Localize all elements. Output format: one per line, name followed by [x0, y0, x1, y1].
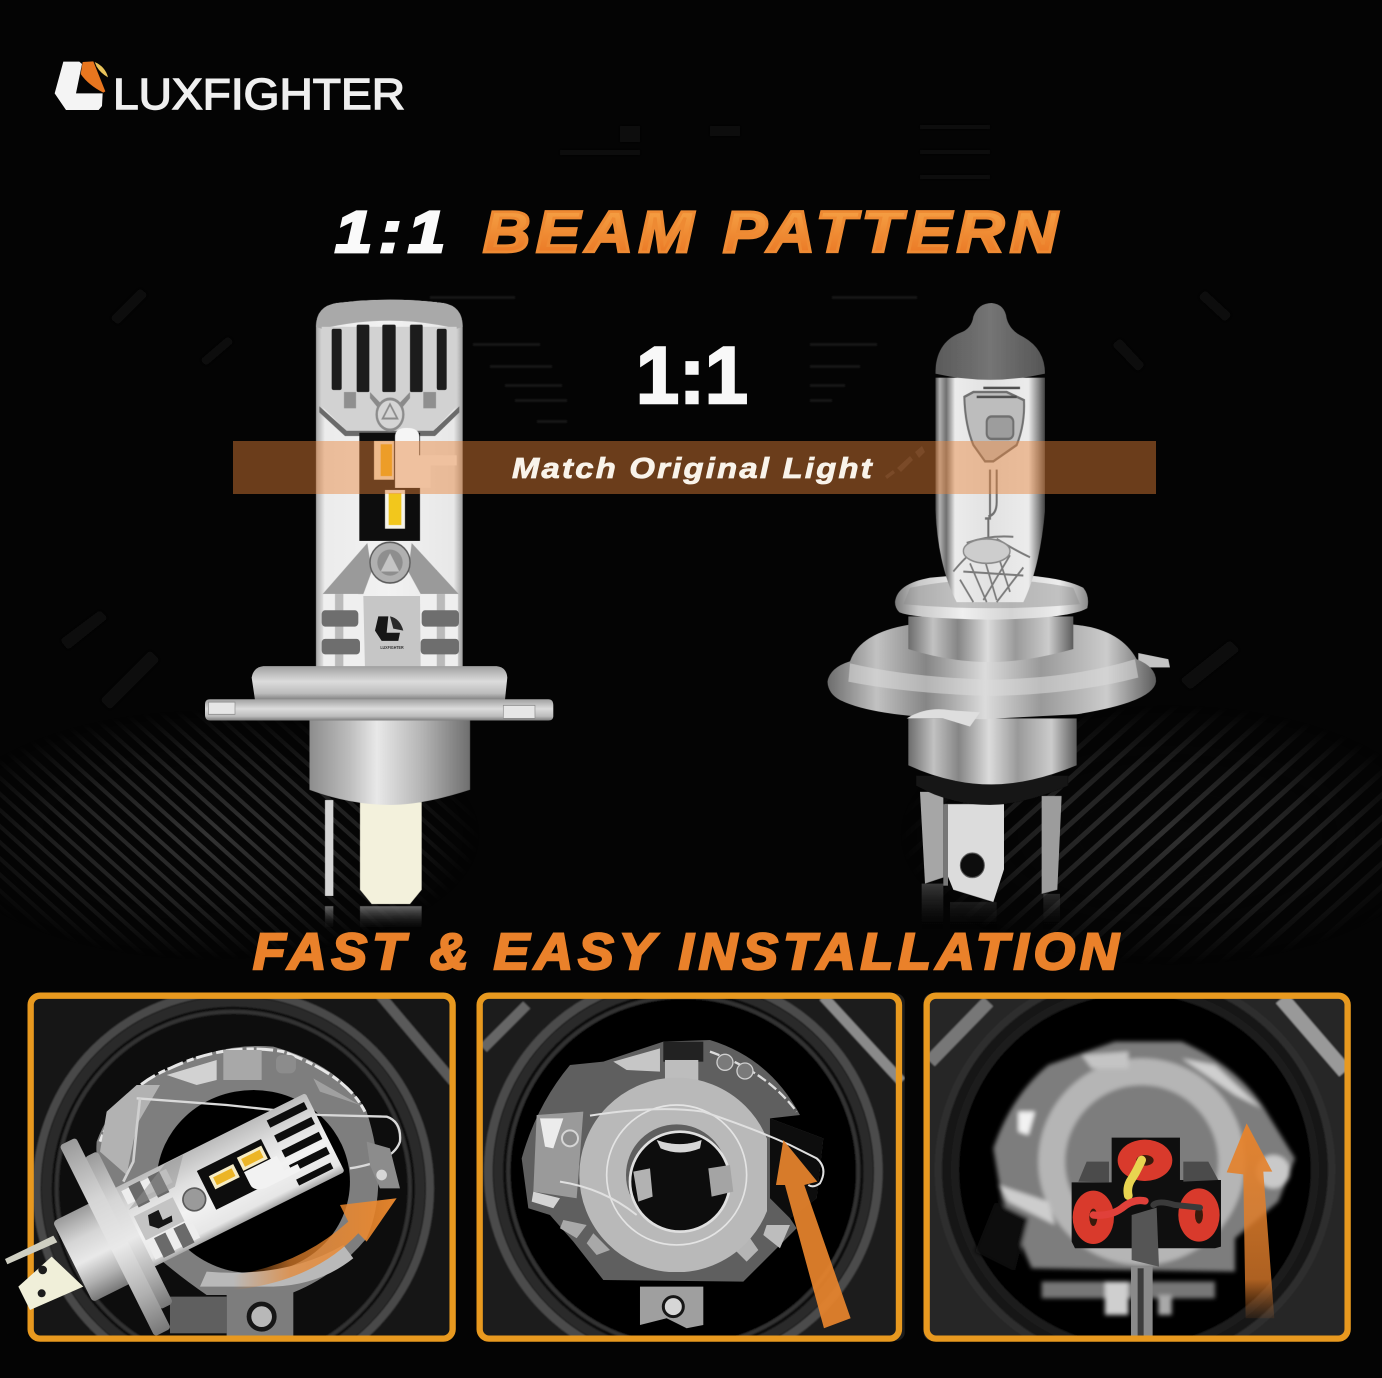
arrow: [233, 1198, 397, 1290]
title: 1:1 beam pattern: 1:1: [335, 200, 452, 265]
background: [0, 125, 1382, 946]
halogen right terminal: [1042, 796, 1062, 894]
angled LED window: [196, 1139, 271, 1210]
LED bulb reflection: [325, 906, 422, 930]
halogen flange: [827, 625, 1170, 727]
arrow: [1227, 1123, 1274, 1318]
spring clip wire: [560, 1109, 823, 1215]
glass envelope: [935, 378, 1045, 602]
LED bulb: [205, 300, 553, 930]
angled head body: [114, 1093, 345, 1267]
left red terminal: [1073, 1191, 1114, 1244]
glass base wires: [953, 536, 1030, 602]
logo icon: [55, 61, 108, 110]
chevron arms: [323, 543, 459, 594]
amber LED chip lower: [385, 490, 405, 529]
black wire: [1153, 1202, 1200, 1208]
headlight housing: [30, 998, 450, 1338]
right red terminal: [1178, 1188, 1220, 1242]
angled tabs: [121, 1155, 200, 1260]
grill backing: [322, 327, 457, 431]
lower heat sink tabs: [322, 594, 459, 669]
logo plate: LUXFIGHTER: [380, 645, 404, 650]
angled flange: [59, 1137, 171, 1337]
large 1:1 heading: 1:1: [636, 331, 748, 421]
headlight housing: [482, 994, 905, 1341]
halogen center terminal: [943, 804, 1004, 902]
angled disc: [182, 1187, 206, 1212]
LED bulb barrel: [309, 720, 470, 805]
angled chips: [207, 1146, 270, 1189]
halogen black ring: [916, 776, 1068, 805]
LED bulb flange: [205, 699, 553, 720]
panel frame: [480, 996, 899, 1339]
bulb inserted at an angle: [54, 1094, 344, 1336]
angled collar: [84, 1151, 173, 1310]
cable: [1131, 1208, 1159, 1337]
angled shield: [244, 1158, 300, 1190]
retaining plate: [587, 1060, 758, 1262]
wide terminal pin: [360, 802, 422, 904]
title: 1:1 beam pattern: BEAM PATTERN: [483, 200, 1063, 265]
halogen left terminal: [920, 792, 943, 884]
band label: Match Original Light: [512, 453, 874, 485]
bulb terminals past the frame: [5, 1236, 83, 1310]
halogen lower reflections: [922, 884, 1060, 930]
panel: step 3 connect plug: [924, 992, 1351, 1342]
match original light band: [233, 441, 1156, 494]
logo plate: [363, 596, 421, 669]
connector plug: [1072, 1138, 1221, 1248]
amber LED chip upper: [374, 441, 394, 480]
socket body: [522, 1040, 823, 1282]
logo wordmark: LUXFIGHTER: [113, 70, 405, 119]
filament shield and stem: [964, 388, 1024, 545]
LED shield: [395, 428, 457, 488]
halogen lower collar: [908, 616, 1073, 662]
panel: step 2 lock clip: [478, 977, 905, 1367]
gray cap: [935, 303, 1045, 380]
blurred socket: [975, 1042, 1295, 1315]
upper red terminal: [1118, 1140, 1172, 1181]
section heading: fast and easy installation: FAST & EASY INSTALLATION: [253, 923, 1124, 980]
alignment disc: [370, 542, 410, 583]
panel: step 1 insert bulb: [5, 992, 455, 1378]
LED head body: [316, 300, 463, 669]
red wire: [1093, 1200, 1145, 1215]
headlight housing: [924, 994, 1349, 1340]
lower fixing clip: [640, 1287, 703, 1328]
grill lower frame: [319, 392, 459, 436]
grill slots: [332, 325, 447, 392]
socket ring: [96, 1046, 400, 1340]
panel frame: [31, 996, 453, 1339]
halogen upper collar: [895, 574, 1088, 620]
panel frame: [927, 996, 1348, 1339]
bulb contacts: [633, 1140, 733, 1202]
yellow wire: [1128, 1160, 1142, 1196]
angled grill: [267, 1102, 336, 1186]
grill cap: [316, 300, 463, 329]
LED bulb collar: [252, 666, 507, 700]
band streaks: [885, 446, 925, 479]
LED window: [359, 433, 420, 541]
logo: [55, 61, 405, 119]
thin terminal pin: [325, 800, 333, 896]
arrow: [776, 1140, 851, 1328]
halogen bulb: [827, 303, 1170, 930]
angled barrel: [53, 1202, 132, 1302]
halogen barrel: [908, 718, 1077, 784]
